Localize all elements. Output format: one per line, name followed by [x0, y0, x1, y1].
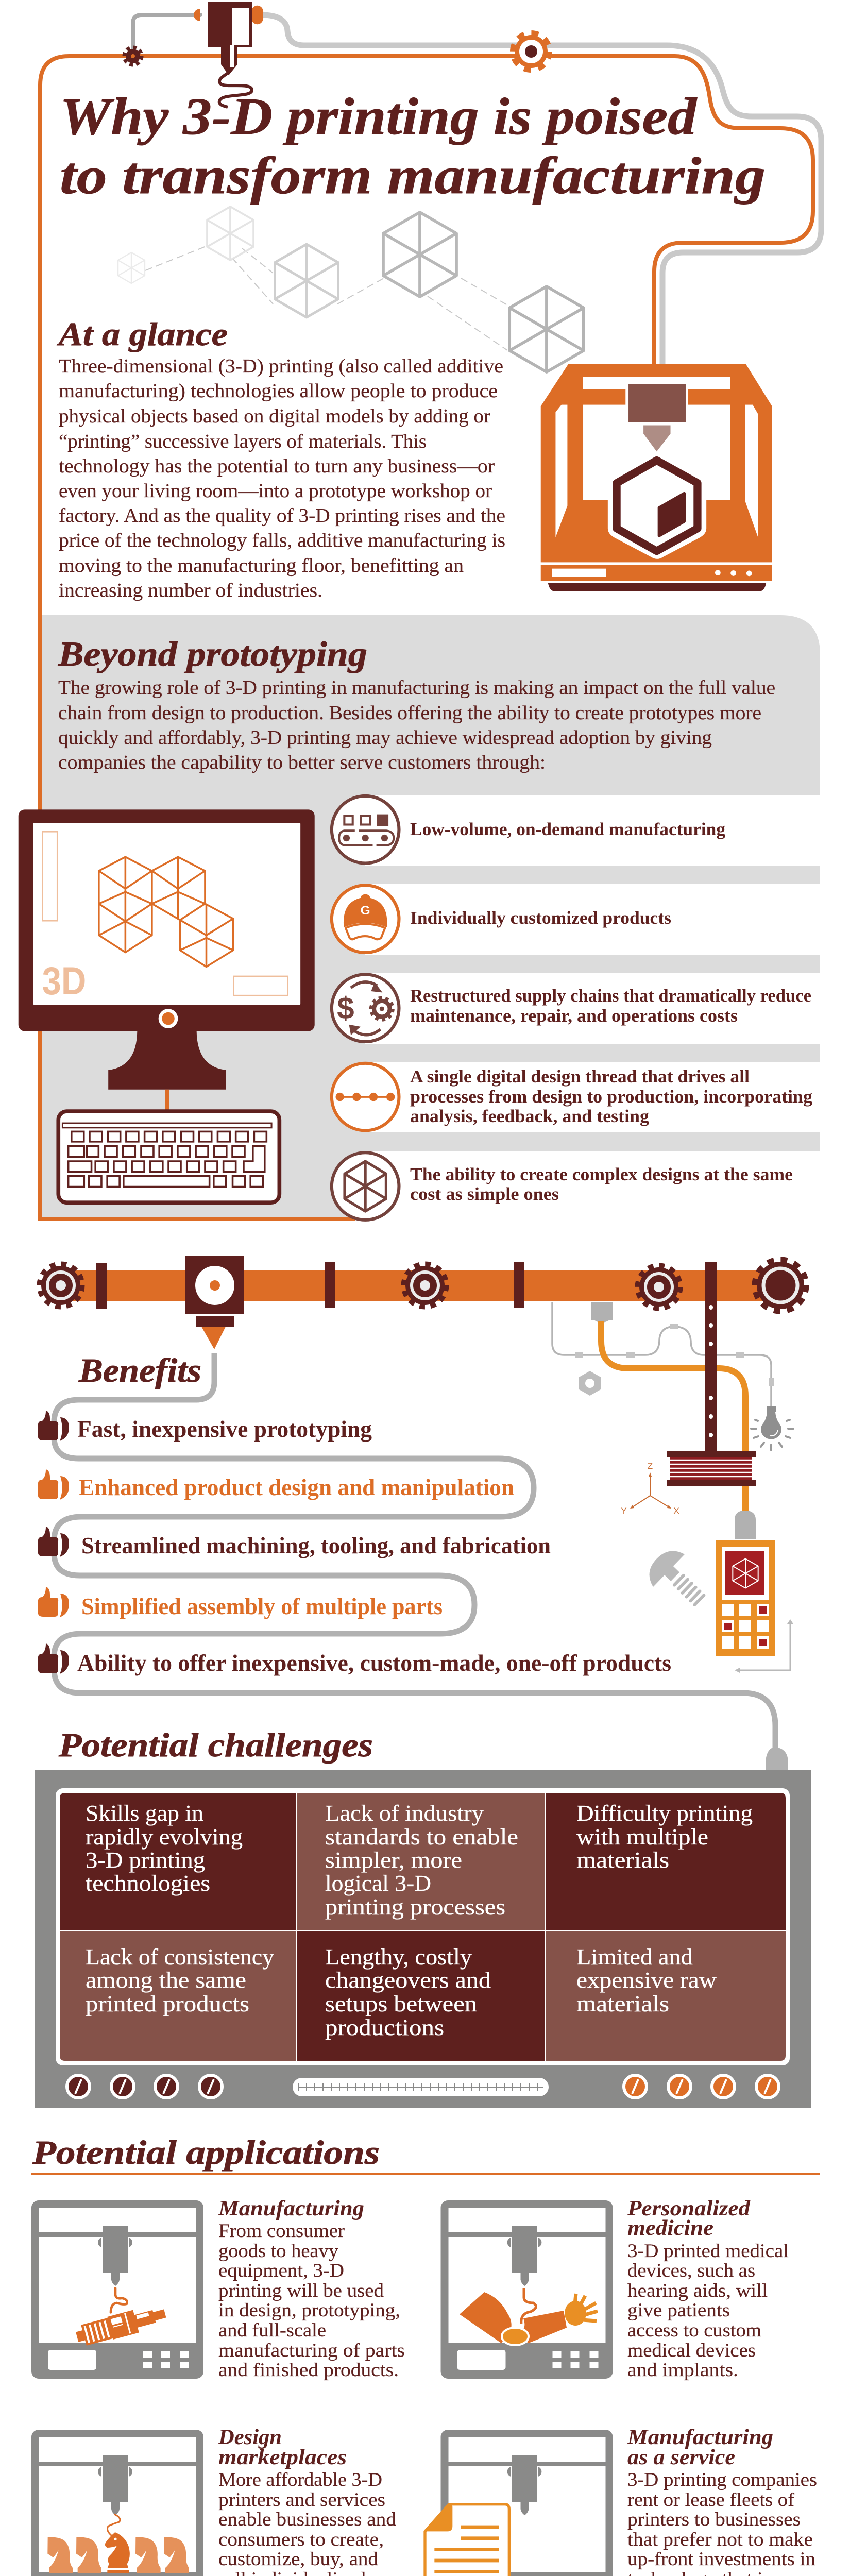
filament tube	[591, 1302, 745, 1512]
challenge 1: Skills gap in	[86, 1801, 203, 1826]
body: in design, prototyping,	[218, 2300, 400, 2321]
body: rent or lease fleets of	[627, 2489, 795, 2511]
text block: at a glance: even your living room—into a prototype workshop or	[59, 480, 492, 502]
item text: supply chains: maintenance, repair, and operations costs	[410, 1006, 738, 1026]
icon: printer with chess knights	[31, 2430, 203, 2576]
body: More affordable 3-D	[218, 2469, 382, 2490]
benefit 3: Streamlined machining, tooling, and fabrication	[81, 1533, 551, 1558]
icon: desktop monitor and keyboard	[19, 809, 315, 1202]
xyz axes: X	[673, 1506, 679, 1516]
challenge 2	[297, 1793, 545, 1930]
body: and finished products.	[218, 2360, 399, 2381]
heading: Potential applications: Potential applications	[32, 2134, 380, 2172]
body: consumers to create,	[218, 2529, 384, 2550]
body: and full-scale	[218, 2320, 326, 2341]
gear 1	[40, 1264, 82, 1307]
body: manufacturing of parts	[218, 2340, 405, 2361]
body: access to custom	[627, 2320, 761, 2341]
heading: Potential applications	[31, 2134, 820, 2175]
heading: Potential challenges: Potential challenges	[58, 1726, 373, 1764]
body: hearing aids, will	[627, 2280, 768, 2301]
spindle with holes	[705, 1262, 717, 1451]
body: goods to heavy	[218, 2241, 339, 2262]
challenge 1: rapidly evolving	[86, 1824, 243, 1850]
icon: printer with spark plug	[31, 2200, 203, 2379]
icon: light bulb	[751, 1406, 793, 1450]
item text: digital thread: A single digital design thread that drives all	[410, 1066, 750, 1087]
icon: dollar and gear cycle	[332, 974, 399, 1042]
item text: low-volume: Low-volume, on-demand manufacturing	[410, 819, 726, 839]
title: medicine	[627, 2216, 713, 2240]
icon: custom cap	[332, 885, 399, 953]
icon: conveyor belt	[332, 796, 399, 863]
text block: at a glance	[59, 355, 505, 601]
challenge 4: among the same	[86, 1968, 246, 1993]
machinery: wires, spool, bulb, controller	[552, 1262, 793, 1673]
item text: customized: Individually customized products	[410, 908, 671, 928]
challenge 3: Difficulty printing	[576, 1801, 753, 1826]
item text: complex designs: The ability to create complex designs at the same	[410, 1164, 793, 1184]
icon: digital thread	[332, 1063, 399, 1130]
text block: at a glance: Three-dimensional (3-D) printing (also called additive	[59, 355, 503, 377]
orange outline of the page frame	[40, 56, 813, 1219]
challenge 6: Limited and	[576, 1944, 693, 1970]
gear 3	[638, 1266, 680, 1308]
challenge 3	[546, 1793, 786, 1930]
body: customize, buy, and	[218, 2549, 379, 2570]
gear 4	[755, 1260, 806, 1311]
text block: beyond prototyping intro: quickly and affordably, 3-D printing may achieve widespread adoption by giving	[58, 727, 712, 749]
item text: digital thread	[410, 1066, 813, 1126]
item text: digital thread: analysis, feedback, and testing	[410, 1106, 650, 1126]
text block: at a glance: factory. And as the quality of 3-D printing rises and the	[59, 505, 505, 527]
icon: screw	[641, 1543, 715, 1616]
challenge 1: 3-D printing	[86, 1848, 205, 1873]
body: 3-D printed medical	[627, 2241, 789, 2262]
application: manufacturing	[31, 2197, 405, 2381]
title: Design	[218, 2426, 282, 2449]
text block: at a glance: physical objects based on digital models by adding or	[59, 405, 490, 427]
benefit 2: Enhanced product design and manipulation	[79, 1475, 514, 1500]
heading: Benefits: Benefits	[78, 1352, 201, 1389]
text block: at a glance: technology has the potential to turn any business—or	[59, 455, 495, 477]
icon: desktop monitor and keyboard: 3D	[42, 959, 86, 1003]
title: Manufacturing	[218, 2197, 364, 2221]
title	[218, 2426, 347, 2469]
challenge 2: simpler, more	[325, 1848, 462, 1873]
item text: supply chains	[410, 986, 811, 1026]
body	[627, 2241, 789, 2381]
list: capability items with icons	[332, 796, 813, 1220]
icon: small gear on frame	[124, 47, 142, 65]
title: as a service	[627, 2446, 735, 2469]
body	[218, 2469, 397, 2576]
item text: complex designs	[410, 1164, 793, 1204]
challenge 4: Lack of consistency	[86, 1944, 274, 1970]
challenge 2: printing processes	[325, 1894, 505, 1920]
icon: orange 3-D printer	[541, 364, 772, 591]
challenge 5: Lengthy, costly	[325, 1944, 472, 1970]
challenge 3: materials	[576, 1848, 669, 1873]
title: to transform manufacturing	[60, 147, 766, 205]
orange knobs	[622, 2074, 780, 2099]
challenge 1	[60, 1793, 296, 1930]
title: Manufacturing	[627, 2426, 773, 2449]
challenge 3: with multiple	[576, 1824, 708, 1850]
icon: dollar and gear cycle: $	[337, 991, 354, 1026]
body: enable businesses and	[218, 2509, 397, 2530]
application: design marketplaces	[31, 2426, 397, 2576]
title	[627, 2426, 773, 2469]
body	[627, 2469, 817, 2576]
title: marketplaces	[218, 2446, 347, 2469]
icon: handheld controller	[716, 1511, 775, 1656]
icon: orange gear on frame	[513, 33, 550, 70]
benefit 1: Fast, inexpensive prototyping	[77, 1416, 372, 1442]
text block: at a glance: manufacturing) technologies allow people to produce	[59, 380, 498, 402]
icon: printer with contract and handshake	[425, 2430, 613, 2576]
orange gantry bar with gears and print head	[40, 1256, 806, 1349]
body: that prefer not to make	[627, 2529, 813, 2550]
challenge 2: standards to enable	[325, 1824, 518, 1850]
challenge 6	[546, 1931, 786, 2061]
challenge 2: Lack of industry	[325, 1801, 484, 1826]
title: Why 3-D printing is poised	[60, 88, 698, 146]
title: Personalized	[627, 2197, 751, 2221]
text block: beyond prototyping intro	[58, 677, 775, 773]
icon: complex hexagon design	[332, 1153, 399, 1220]
body: 3-D printing companies	[627, 2469, 817, 2490]
icon: print head at top	[194, 2, 263, 107]
challenge 5: productions	[325, 2015, 444, 2040]
body: and implants.	[627, 2360, 738, 2381]
icon: custom cap: G	[361, 904, 370, 918]
body: medical devices	[627, 2340, 756, 2361]
heading: At a glance: At a glance	[57, 316, 228, 352]
xyz axes	[621, 1461, 679, 1516]
text block: beyond prototyping intro: chain from design to production. Besides offering the ability to create prototypes more	[58, 702, 761, 724]
item text: complex designs: cost as simple ones	[410, 1184, 559, 1204]
panel: beyond prototyping background	[42, 615, 820, 1217]
text block: at a glance: “printing” successive layers of materials. This	[59, 431, 427, 452]
thin gray wire	[552, 1302, 774, 1407]
xyz axes: Y	[621, 1506, 627, 1516]
dark knobs	[65, 2074, 224, 2099]
ruler slot	[293, 2078, 549, 2096]
challenge 1: technologies	[86, 1871, 210, 1896]
application: personalized medicine	[441, 2197, 789, 2381]
benefit 4: Simplified assembly of multiple parts	[81, 1594, 443, 1619]
text block: at a glance: increasing number of industries.	[59, 580, 322, 601]
text block: beyond prototyping intro: The growing role of 3-D printing in manufacturing is making an impact on the full value	[58, 677, 775, 699]
body: From consumer	[218, 2221, 345, 2242]
text block: at a glance: moving to the manufacturing floor, benefitting an	[59, 555, 464, 577]
challenge 4	[60, 1931, 296, 2061]
body: equipment, 3-D	[218, 2260, 344, 2281]
text block: beyond prototyping intro: companies the capability to better serve customers through:	[58, 752, 546, 773]
challenge 6: materials	[576, 1991, 669, 2016]
application: manufacturing as a service	[425, 2426, 817, 2576]
top feed wire (gray)	[133, 15, 821, 364]
challenge 5: setups between	[325, 1991, 477, 2016]
body: printers and services	[218, 2489, 385, 2511]
item text: digital thread: processes from design to production, incorporating	[410, 1087, 813, 1107]
panel: potential challenges	[35, 1770, 811, 2108]
white rows behind capability items	[365, 795, 820, 1222]
benefit 5: Ability to offer inexpensive, custom-made, one-off products	[77, 1650, 671, 1676]
wire connector to challenges panel	[766, 1748, 788, 1771]
challenge 5	[297, 1931, 545, 2061]
title	[627, 2197, 751, 2240]
body: up-front investments in	[627, 2549, 815, 2570]
wireframe hexagons being printed	[118, 207, 584, 372]
challenge 2: logical 3-D	[325, 1871, 431, 1896]
xyz axes: Z	[648, 1461, 653, 1471]
body	[218, 2221, 405, 2381]
body: devices, such as	[627, 2260, 755, 2281]
item text: supply chains: Restructured supply chains that dramatically reduce	[410, 986, 811, 1006]
challenge 5: changeovers and	[325, 1968, 491, 1993]
text block: at a glance: price of the technology falls, additive manufacturing is	[59, 530, 505, 551]
print head	[185, 1256, 244, 1349]
benefit 4	[38, 1587, 443, 1619]
body: printing will be used	[218, 2280, 384, 2301]
gray corner arrow	[735, 1619, 793, 1673]
body: give patients	[627, 2300, 730, 2321]
icon: hex nut	[579, 1371, 601, 1396]
challenge 4: printed products	[86, 1991, 249, 2016]
challenge 6: expensive raw	[576, 1968, 717, 1993]
title	[60, 88, 766, 205]
body: printers to businesses	[627, 2509, 801, 2530]
benefits wire	[54, 1353, 775, 1752]
spool	[667, 1451, 756, 1486]
gear 2	[404, 1264, 446, 1307]
icon: printer with prosthetic arm	[441, 2200, 613, 2379]
heading: Beyond prototyping: Beyond prototyping	[58, 634, 367, 673]
